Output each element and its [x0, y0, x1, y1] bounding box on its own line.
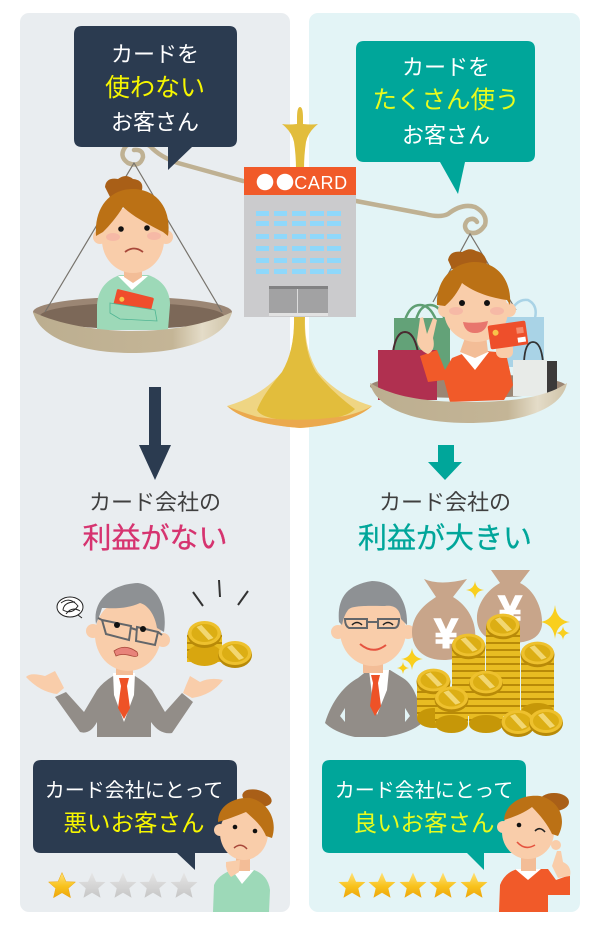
speech bubble: good customer	[322, 760, 526, 870]
coin	[529, 709, 563, 736]
ear	[214, 824, 226, 836]
neck	[460, 335, 488, 358]
back bag yen: ¥	[498, 587, 522, 634]
hair bun	[448, 249, 487, 269]
head	[102, 207, 164, 273]
hair	[504, 796, 562, 836]
head	[340, 596, 406, 666]
panel: customers who do not use the card	[20, 13, 290, 912]
bubble highlight: たくさん使う	[372, 86, 520, 114]
suit	[325, 670, 423, 737]
torso	[213, 870, 270, 912]
pan inside	[40, 303, 224, 329]
building windows	[256, 211, 341, 274]
eyes	[114, 622, 146, 632]
open mouth	[463, 321, 488, 333]
sign text: CARD	[294, 173, 348, 193]
woman: sad, holding card	[93, 176, 173, 330]
blue shopping bag	[503, 300, 544, 367]
hand with pointing finger	[552, 851, 570, 878]
winking eye	[535, 829, 545, 832]
mouth	[114, 647, 138, 656]
right scale pan with woman and shopping bags	[370, 234, 567, 423]
left scale pan with woman	[33, 163, 232, 353]
cheeks	[106, 232, 161, 241]
happy businessman	[325, 581, 423, 737]
confusion speech scribble	[57, 597, 83, 618]
pan front	[33, 312, 232, 353]
money bags with yen symbol	[412, 570, 542, 660]
hand on chin	[226, 860, 240, 877]
ears	[331, 625, 415, 639]
collar	[118, 276, 148, 290]
head	[444, 280, 508, 342]
heading: large profit: カード会社の	[379, 490, 511, 515]
ears	[497, 821, 561, 850]
building body	[244, 195, 356, 317]
star rating: one of five	[48, 872, 198, 898]
small coin stack	[187, 621, 252, 668]
smiling eyes	[352, 622, 393, 625]
gold coin stacks	[416, 614, 563, 737]
panel: customers who use the card a lot	[309, 13, 580, 912]
torso	[499, 869, 570, 912]
shirt	[369, 670, 389, 715]
bubble text: カード会社にとって	[45, 779, 223, 802]
glasses	[98, 618, 162, 645]
glasses	[345, 619, 399, 628]
back bag	[477, 570, 542, 643]
arm gaps	[340, 708, 410, 722]
eyes	[459, 300, 490, 306]
heading: no profit: カード会社の	[89, 490, 221, 515]
bubble text: お客さん	[402, 123, 490, 148]
neck	[236, 855, 250, 871]
pan back	[370, 374, 566, 398]
hair	[96, 189, 169, 236]
neck	[124, 265, 142, 283]
small woman winking	[497, 793, 570, 912]
stack	[434, 687, 468, 733]
maroon shopping bag	[378, 332, 437, 400]
eye	[517, 823, 521, 827]
hair	[218, 798, 274, 838]
heading: no profit	[82, 490, 228, 555]
hair bun	[105, 176, 142, 197]
card	[113, 289, 154, 314]
credit card	[488, 320, 528, 350]
head	[95, 599, 161, 671]
scale beam right	[356, 201, 486, 233]
scale beam left	[122, 142, 243, 181]
speech bubble: customers who do not use card	[74, 26, 237, 170]
heading: large profit	[358, 490, 532, 555]
front bag yen: ¥	[434, 610, 458, 657]
mouth	[125, 248, 143, 252]
left hand	[26, 671, 64, 694]
bank building	[244, 167, 356, 317]
heading highlight: 利益が大きい	[358, 522, 532, 555]
smile	[360, 644, 386, 650]
bubble highlight: 良いお客さん	[354, 810, 494, 836]
stand base rim	[227, 316, 372, 428]
stack	[469, 671, 503, 733]
head	[502, 805, 554, 859]
coin	[501, 710, 535, 737]
stack	[520, 642, 554, 721]
mouth	[234, 845, 247, 849]
ears	[93, 230, 173, 244]
speech bubble: bad customer	[33, 760, 237, 870]
bubble text: カード会社にとって	[335, 779, 513, 802]
tie	[370, 675, 381, 716]
hair	[95, 583, 165, 632]
tie	[118, 678, 130, 719]
bubble text: お客さん	[111, 110, 199, 135]
head	[220, 806, 268, 860]
pan strings	[433, 234, 516, 310]
neck	[363, 655, 383, 673]
eyes	[233, 825, 257, 833]
building sign	[244, 167, 356, 195]
pan back	[33, 297, 232, 327]
front bag	[412, 579, 475, 660]
sign dots	[257, 174, 293, 190]
raised hand	[496, 338, 513, 358]
woman: happy, holding card	[417, 249, 528, 402]
cheeks	[449, 307, 504, 315]
neck	[116, 660, 133, 675]
pan front	[370, 383, 567, 423]
shirt	[113, 673, 135, 722]
hair	[437, 262, 510, 306]
eyes	[118, 225, 150, 232]
bubble text: カードを	[111, 42, 199, 67]
heading highlight: 利益がない	[82, 522, 228, 555]
stack	[486, 614, 520, 716]
pan strings	[45, 163, 222, 312]
collar	[515, 869, 541, 880]
torso	[97, 275, 170, 330]
sparkles	[397, 581, 570, 674]
bubble text: カードを	[402, 55, 490, 80]
bubble highlight: 悪いお客さん	[64, 810, 204, 836]
troubled businessman	[26, 583, 223, 737]
grey shopping bag	[513, 342, 557, 396]
balance scale: beam and stand	[122, 107, 486, 428]
peace sign hand	[417, 317, 437, 354]
collar	[460, 352, 489, 370]
torso	[420, 350, 513, 402]
neck	[521, 855, 536, 871]
small woman thinking	[213, 786, 274, 912]
stand base	[257, 316, 355, 421]
speech bubble: customers who use card a lot	[356, 41, 535, 194]
star rating: five of five	[338, 872, 488, 898]
building door	[269, 286, 328, 316]
stand base bottom edge	[227, 406, 372, 428]
arrow: left down	[139, 387, 171, 480]
stand finial	[282, 107, 318, 170]
arrow: right down	[428, 445, 462, 480]
hair	[339, 581, 407, 625]
bubble highlight: 使わない	[105, 74, 205, 102]
green shopping bag	[394, 305, 450, 380]
stack	[452, 634, 486, 716]
hair bun	[240, 786, 274, 810]
hair bun	[539, 793, 569, 811]
ears	[86, 624, 170, 647]
collar	[232, 870, 254, 884]
right hand	[183, 676, 223, 698]
surprise lines	[193, 580, 248, 606]
stack	[416, 669, 450, 728]
ears	[438, 303, 516, 317]
suit	[55, 676, 193, 737]
crossed arms	[110, 303, 157, 321]
smile	[517, 842, 535, 847]
